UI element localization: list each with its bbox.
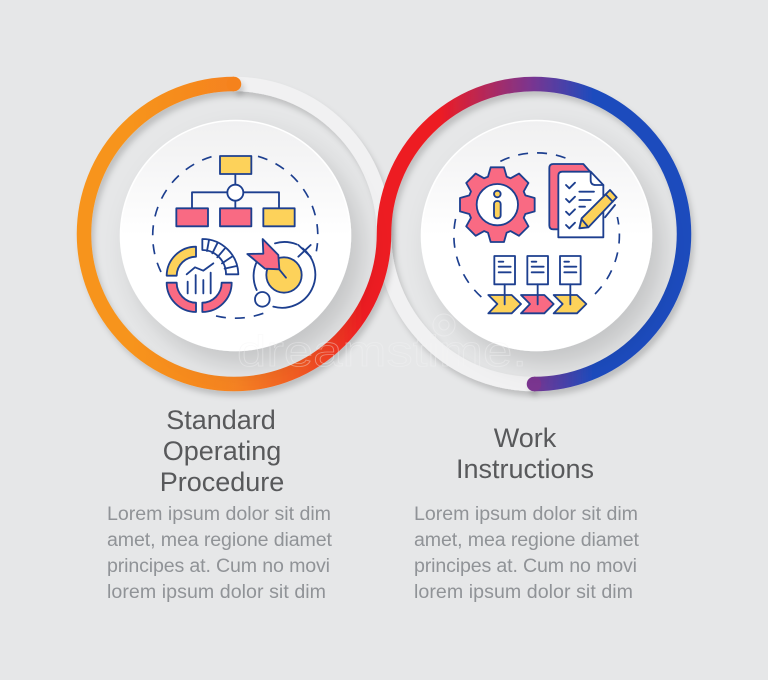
icon: target with arrow xyxy=(247,239,315,308)
body text: left: Lorem ipsum dolor sit dim xyxy=(107,503,331,525)
body text: left: amet, mea regione diamet xyxy=(107,529,333,551)
body text: left: principes at. Cum no movi xyxy=(107,555,330,577)
gradient rings: orange to red to blue xyxy=(84,77,684,391)
icon: checklist and pencil xyxy=(549,164,617,237)
heading: Work Instructions: Work xyxy=(494,423,557,453)
icon: work instructions xyxy=(454,153,619,313)
body text: right: lorem ipsum dolor sit dim xyxy=(414,581,633,603)
light track: right ring remainder xyxy=(384,234,534,384)
watermark xyxy=(237,314,527,376)
light track: left ring remainder xyxy=(234,84,384,234)
body text: right: principes at. Cum no movi xyxy=(414,555,637,577)
icon: process steps xyxy=(488,256,586,313)
icon: donut chart xyxy=(167,239,238,312)
icon: org chart xyxy=(176,156,295,226)
heading: Standard Operating Procedure: Procedure xyxy=(160,467,284,497)
watermark: dreamstime. xyxy=(237,327,527,376)
body text: left: lorem ipsum dolor sit dim xyxy=(107,581,326,603)
heading: Standard Operating Procedure: Operating xyxy=(163,436,281,466)
body text: right: Lorem ipsum dolor sit dim xyxy=(414,503,638,525)
heading: Work Instructions: Instructions xyxy=(456,454,594,484)
disc: right xyxy=(422,120,652,350)
heading: Standard Operating Procedure: Standard xyxy=(166,405,276,435)
icon: standard operating procedure xyxy=(153,156,318,318)
disc: left xyxy=(120,120,350,350)
icon: gear with info xyxy=(460,167,535,242)
body text: right: amet, mea regione diamet xyxy=(414,529,640,551)
